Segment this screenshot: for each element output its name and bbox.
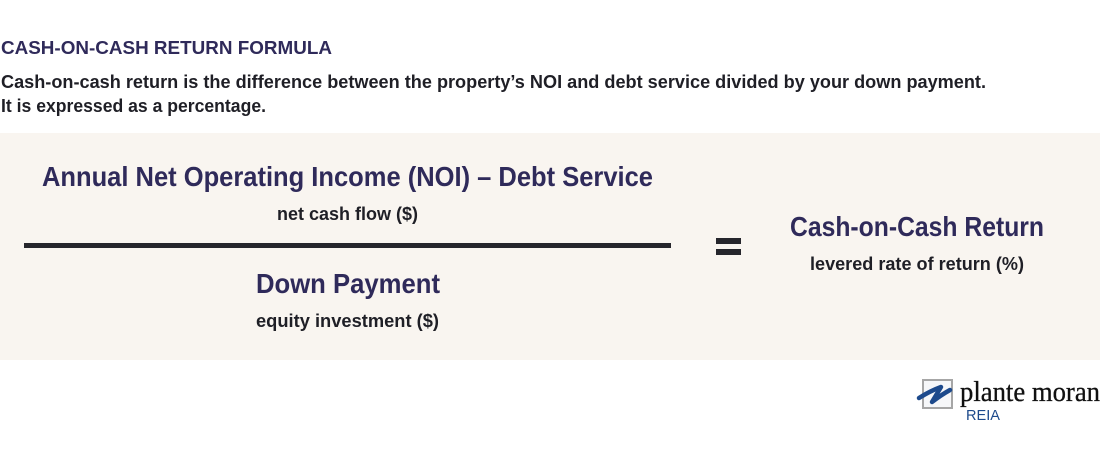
logo: plante moran REIA — [919, 377, 1100, 424]
denominator caption: equity investment ($) — [256, 310, 439, 331]
fraction bar — [24, 243, 671, 248]
intro text — [1, 71, 986, 116]
panel: formula — [0, 133, 1100, 360]
equals sign — [716, 238, 741, 255]
REIA label: REIA — [966, 407, 1000, 424]
denominator heading: Down Payment — [256, 268, 440, 299]
numerator caption: net cash flow ($) — [277, 203, 418, 224]
result heading: Cash-on-Cash Return — [790, 211, 1044, 242]
result caption: levered rate of return (%) — [810, 253, 1024, 274]
intro text: Cash-on-cash return is the difference between the property’s NOI and debt service divided by your down payment. — [1, 71, 986, 92]
icon: logo mark — [919, 380, 952, 408]
title: CASH-ON-CASH RETURN FORMULA — [1, 38, 332, 58]
numerator heading: Annual Net Operating Income (NOI) – Debt Service — [42, 161, 653, 192]
intro text: It is expressed as a percentage. — [1, 95, 266, 116]
